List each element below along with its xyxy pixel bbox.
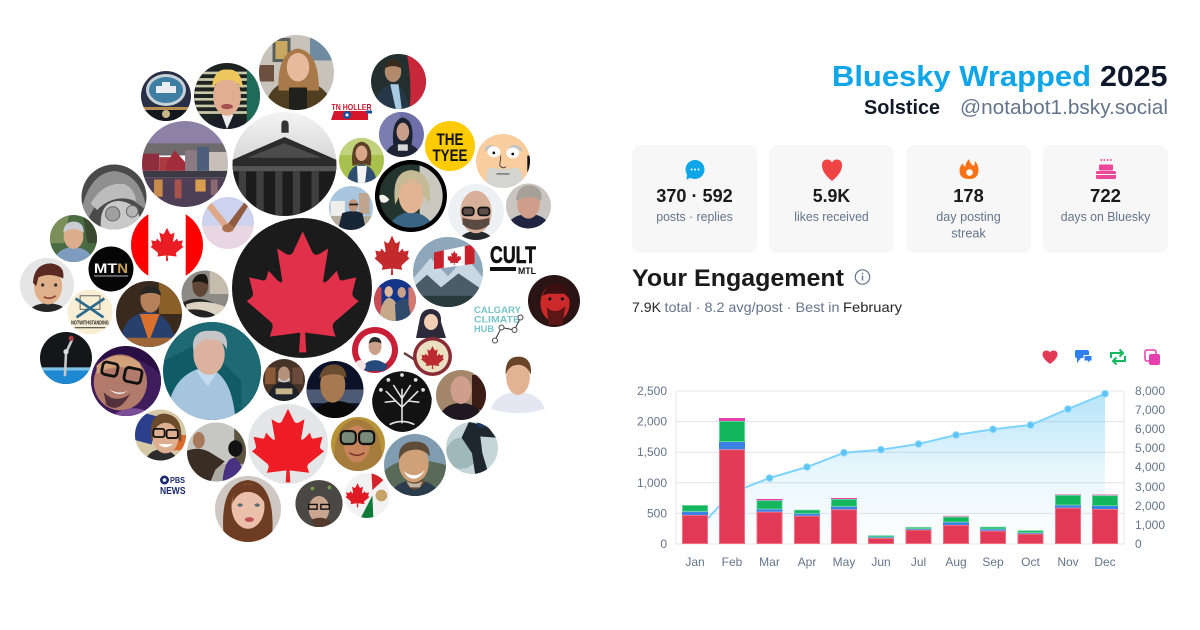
avatar: man in orange vest xyxy=(116,281,182,347)
avatar: George style portrait xyxy=(50,215,97,262)
engagement summary: 7.9K xyxy=(632,299,662,315)
stat label: days on Bluesky xyxy=(1061,209,1151,224)
month labels: Aug xyxy=(945,555,967,569)
avatar: PBS News logo: PBS xyxy=(170,476,186,485)
avatar: Canadian flag over mountains xyxy=(413,237,483,307)
right axis labels: 1,000 xyxy=(1135,518,1165,532)
avatar: Notwithstanding logo xyxy=(68,290,112,334)
avatar: handshake in front of flags xyxy=(374,279,416,321)
month labels xyxy=(685,555,1116,569)
right axis labels: 6,000 xyxy=(1135,422,1165,436)
avatar: The Tyee logo xyxy=(425,121,475,171)
avatar: Canada and Mexico flags xyxy=(344,473,390,518)
icon: reposts xyxy=(1111,350,1125,364)
avatar: MTN logo: N xyxy=(117,261,128,276)
avatar: PBS News logo xyxy=(160,476,186,497)
avatar: building with columns xyxy=(232,112,336,216)
right axis labels: 3,000 xyxy=(1135,480,1165,494)
avatar: blond woman with black ring xyxy=(375,160,447,232)
avatar: man with canadian flag xyxy=(371,54,426,109)
stat label xyxy=(936,209,1001,240)
avatar: pixel girl with maple shield xyxy=(404,309,452,376)
stat value: 722 xyxy=(1090,186,1121,206)
engagement summary xyxy=(632,299,902,315)
user name and handle: Solstice xyxy=(864,97,940,119)
heading: Your Engagement: Your Engagement xyxy=(632,265,844,292)
icon: flame xyxy=(960,159,978,179)
month labels: Jul xyxy=(911,555,926,569)
icon: quotes xyxy=(1145,350,1160,365)
avatar: skeleton in space xyxy=(40,332,92,384)
title: 2025 xyxy=(1100,61,1168,93)
avatar: fur hood woman xyxy=(296,480,342,527)
panel: likes received xyxy=(769,145,894,253)
stat value: 370 · 592 xyxy=(656,186,733,206)
avatar: blond man on white xyxy=(491,356,545,413)
avatar: Canadian flag xyxy=(131,214,203,276)
avatar: man on a sunny street xyxy=(329,186,373,230)
avatar: hoodie man xyxy=(379,112,424,157)
user name and handle: @notabot1.bsky.social xyxy=(960,97,1168,119)
icon: info xyxy=(855,270,870,284)
stat label: posts · replies xyxy=(656,209,733,224)
avatar: Calgary Climate Hub logo xyxy=(474,305,523,343)
title: Bluesky Wrapped xyxy=(832,61,1091,93)
month labels: Oct xyxy=(1021,555,1040,569)
stat label: likes received xyxy=(794,209,869,224)
avatar: gray-haired person black and white xyxy=(82,164,146,230)
avatar: smiling man with goatee xyxy=(384,434,446,496)
avatar: Cult MTL logo: MTL xyxy=(518,266,536,276)
stat value: 5.9K xyxy=(813,186,850,206)
left axis labels: 2,500 xyxy=(637,384,667,398)
avatar: red maple leaf on gray xyxy=(248,404,328,484)
icon: cake xyxy=(1096,159,1116,179)
avatar: man in dark clothes xyxy=(182,270,228,318)
left axis labels: 1,000 xyxy=(637,476,667,490)
right axis labels xyxy=(1135,384,1165,551)
avatar: PBS News logo: NEWS xyxy=(160,486,186,497)
month labels: Dec xyxy=(1094,555,1116,569)
engagement summary: February xyxy=(843,299,902,315)
avatar: white tree of gondor xyxy=(372,371,432,432)
avatar: red-haired woman xyxy=(215,476,281,542)
panel: avatar bubble cloud xyxy=(20,35,580,542)
panel: posts and replies xyxy=(632,145,757,253)
avatar: Cult MTL logo xyxy=(490,242,536,276)
avatar: red-toned bearded face xyxy=(528,275,580,327)
right axis labels: 0 xyxy=(1135,537,1142,551)
avatar: harbour town at dusk xyxy=(142,121,228,207)
month labels: Mar xyxy=(759,555,780,569)
cumulative line xyxy=(695,394,1105,532)
left axis labels xyxy=(637,384,667,551)
avatar: bald man with glasses xyxy=(448,184,504,240)
icon: replies xyxy=(1075,350,1092,364)
right axis labels: 8,000 xyxy=(1135,384,1165,398)
avatar: Calgary Climate Hub logo: CLIMATE xyxy=(474,314,520,326)
panel: day posting streak xyxy=(906,145,1031,253)
avatar: Calgary Climate Hub logo: HUB xyxy=(474,324,494,335)
bars: reposts xyxy=(682,422,1118,537)
avatar: two people outdoors xyxy=(187,422,246,482)
avatar: TN Holler logo: TN HOLLER xyxy=(332,103,372,112)
month labels: Apr xyxy=(798,555,816,569)
line points xyxy=(766,390,1108,481)
user name and handle xyxy=(864,97,1168,119)
avatar: woman in denim jacket xyxy=(339,138,384,183)
avatar: man reading book xyxy=(263,359,305,401)
avatar: cartoon old man xyxy=(476,134,530,188)
avatar: man in blue shirt xyxy=(163,322,261,420)
avatar: bald man in dark shirt xyxy=(436,370,486,420)
engagement chart xyxy=(637,384,1165,569)
avatar: MTN logo: MT xyxy=(94,261,118,276)
stat value: 178 xyxy=(953,186,984,206)
avatar: TN Holler logo xyxy=(331,103,372,120)
avatar: Calgary Climate Hub logo: CALGARY xyxy=(474,305,522,316)
avatar: MTN logo xyxy=(88,246,134,292)
left axis labels: 1,500 xyxy=(637,445,667,459)
right axis labels: 4,000 xyxy=(1135,460,1165,474)
icon: speech bubble xyxy=(686,160,704,180)
left axis labels: 500 xyxy=(647,506,667,520)
cumulative area xyxy=(695,394,1105,544)
avatar: woman with art on the wall xyxy=(259,35,334,110)
month labels: May xyxy=(833,555,855,569)
avatar: painted glasses woman xyxy=(331,417,385,471)
right axis labels: 7,000 xyxy=(1135,403,1165,417)
icon: likes xyxy=(1042,350,1058,364)
avatar: smiling man with glasses purple tint xyxy=(91,346,161,416)
month labels: Jun xyxy=(871,555,891,569)
stat label: streak xyxy=(951,226,986,240)
avatar: holding hands xyxy=(202,197,254,249)
avatar: maple leaf sparkle xyxy=(375,235,409,275)
right axis labels: 2,000 xyxy=(1135,499,1165,513)
avatar: cartoon man xyxy=(20,258,74,312)
engagement summary: total · 8.2 avg/post · Best in xyxy=(664,299,840,315)
left axis labels: 2,000 xyxy=(637,414,667,428)
month labels: Sep xyxy=(982,555,1004,569)
right axis labels: 5,000 xyxy=(1135,441,1165,455)
avatar: glasses woman with news signs xyxy=(135,410,186,460)
avatar: headroom style man xyxy=(194,63,260,129)
bars: quotes xyxy=(719,418,1118,517)
avatar: Canada compass badge xyxy=(352,327,398,373)
month labels: Feb xyxy=(722,555,743,569)
avatar: The Tyee logo: THE xyxy=(436,130,464,149)
stacked bars xyxy=(682,418,1118,544)
avatar: man on dark city xyxy=(306,361,364,418)
panel: days on Bluesky xyxy=(1043,145,1168,253)
stat label: day posting xyxy=(936,209,1001,224)
left axis labels: 0 xyxy=(660,537,667,551)
bars: replies xyxy=(682,442,1118,538)
bars: likes xyxy=(682,450,1118,544)
avatar: Cult MTL logo: CULT xyxy=(490,242,536,269)
gridlines and axes xyxy=(676,391,1124,544)
avatar: big maple leaf on black xyxy=(232,218,372,358)
icon: heart xyxy=(822,160,842,181)
chart legend xyxy=(1042,350,1160,365)
avatar: white house podium xyxy=(141,71,191,121)
avatar: crow and moon xyxy=(446,422,498,474)
month labels: Nov xyxy=(1057,555,1079,569)
avatar: woman with short hair xyxy=(506,184,551,228)
month labels: Jan xyxy=(685,555,705,569)
